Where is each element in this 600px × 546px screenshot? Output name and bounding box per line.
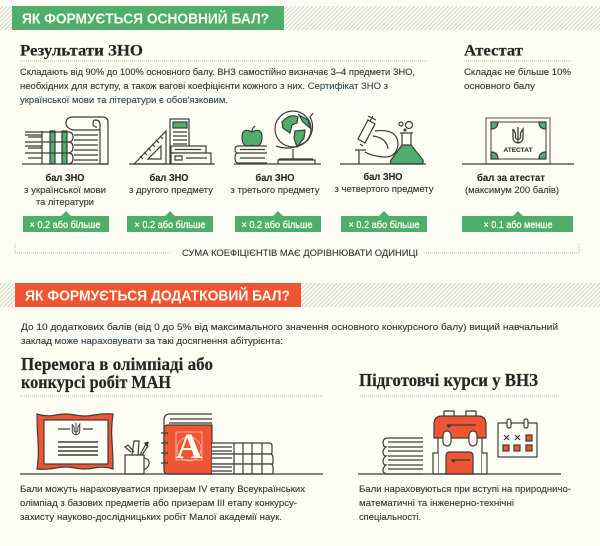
icon: apple, books and globe	[234, 111, 321, 164]
heading: preparatory courses: Підготовчі курси у ВНЗ	[359, 370, 538, 390]
column: Ukrainian language score: бал ЗНО	[46, 172, 85, 184]
heading: olympiad: Перемога в олімпіаді або	[21, 354, 213, 374]
column: fourth subject score	[334, 171, 434, 232]
text block: additional score intro: заклад може нараховувати за такі досягнення абітурієнта:	[21, 336, 283, 347]
column: second subject score: × 0.2 або більше	[134, 219, 206, 231]
column: Ukrainian language score	[23, 172, 109, 232]
column: second subject score: з другого предмету	[129, 185, 213, 196]
heading: olympiad	[20, 354, 323, 396]
icon: microscope and flask	[340, 116, 426, 164]
column: certificate score: бал за атестат	[477, 172, 545, 184]
section header: additional score	[0, 283, 600, 307]
panel: certificate text: основного балу	[464, 81, 535, 92]
icon: framed diploma	[37, 414, 113, 469]
text block: olympiad description: захисту науково-дослідницьких робіт Малої академії наук.	[20, 512, 282, 523]
text block: olympiad description: Бали можуть нараховуватися призерам IV етапу Всеукраїнських	[20, 484, 305, 495]
column: third subject score: × 0.2 або більше	[242, 219, 313, 231]
text block: additional score intro	[21, 322, 558, 347]
note: coefficients sum	[15, 243, 579, 259]
column: second subject score	[127, 172, 213, 232]
icon: ruler triangle and textbooks	[129, 119, 215, 164]
text block: courses description: математичні та інженерно-технічні	[359, 498, 514, 509]
column: second subject score: бал ЗНО	[150, 172, 189, 184]
icon: pencil cup	[125, 441, 149, 474]
icon: backpack	[433, 411, 487, 474]
column: Ukrainian language score: та літератури	[36, 197, 94, 208]
text block: courses description: Бали нараховуються при вступі на природничо-	[359, 484, 571, 495]
panel: ZNO results text: української мови та літератури є обов'язковим.	[20, 95, 228, 106]
column: certificate score: (максимум 200 балів)	[465, 185, 559, 196]
column: certificate score	[462, 172, 573, 232]
text block: courses description: спеціальності.	[359, 512, 421, 523]
icon: school certificate	[462, 118, 574, 164]
text block: additional score intro: До 10 додаткових балів (від 0 до 5% від максимального значення основного конкурсного балу) вищий навчальний	[21, 322, 558, 333]
panel: ZNO results text	[20, 42, 427, 106]
text block: olympiad description	[20, 484, 305, 523]
icon: school certificate: АТЕСТАТ	[503, 147, 533, 154]
column: third subject score: бал ЗНО	[256, 172, 295, 184]
text block: courses description	[359, 484, 571, 523]
icon: books and scroll	[22, 117, 108, 164]
column: third subject score: з третього предмету	[230, 185, 320, 196]
icon: academy book and stack: A	[176, 426, 202, 466]
column: fourth subject score: × 0.2 або більше	[348, 219, 420, 231]
panel: ZNO results text: Результати ЗНО	[20, 42, 143, 60]
panel: ZNO results text: Складають від 90% до 100% основного балу. ВНЗ самостійно визначає 3–4 предмети ЗНО,	[20, 67, 415, 78]
panel: ZNO results text: необхідних для вступу, а також вагові коефіцієнти кожного з них. Сертифікат ЗНО з	[20, 81, 388, 92]
column: Ukrainian language score: з української мови	[24, 185, 106, 196]
icon: stacked books	[383, 438, 423, 474]
column: Ukrainian language score: × 0.2 або більше	[30, 219, 101, 231]
note: coefficients sum: СУМА КОЕФІЦІЄНТІВ МАЄ ДОРІВНЮВАТИ ОДИНИЦІ	[182, 248, 418, 259]
section header: main score	[0, 6, 600, 30]
icon: calendar	[358, 419, 561, 474]
panel: certificate text: Атестат	[464, 42, 523, 60]
column: certificate score: × 0.1 або менше	[484, 219, 553, 231]
panel: certificate text	[464, 42, 572, 92]
icon: academy book and stack	[20, 414, 323, 474]
section header: additional score: ЯК ФОРМУЄТЬСЯ ДОДАТКОВИЙ БАЛ?	[25, 286, 290, 304]
column: third subject score	[230, 172, 321, 232]
section header: main score: ЯК ФОРМУЄТЬСЯ ОСНОВНИЙ БАЛ?	[22, 10, 269, 28]
panel: certificate text: Складає не більше 10%	[464, 67, 572, 78]
heading: olympiad: конкурсі робіт МАН	[21, 372, 171, 392]
text block: olympiad description: олімпіад з базових предметів або призерам III етапу конкурсу-	[20, 498, 297, 509]
column: fourth subject score: бал ЗНО	[364, 171, 403, 183]
column: fourth subject score: з четвертого предмету	[334, 184, 434, 195]
